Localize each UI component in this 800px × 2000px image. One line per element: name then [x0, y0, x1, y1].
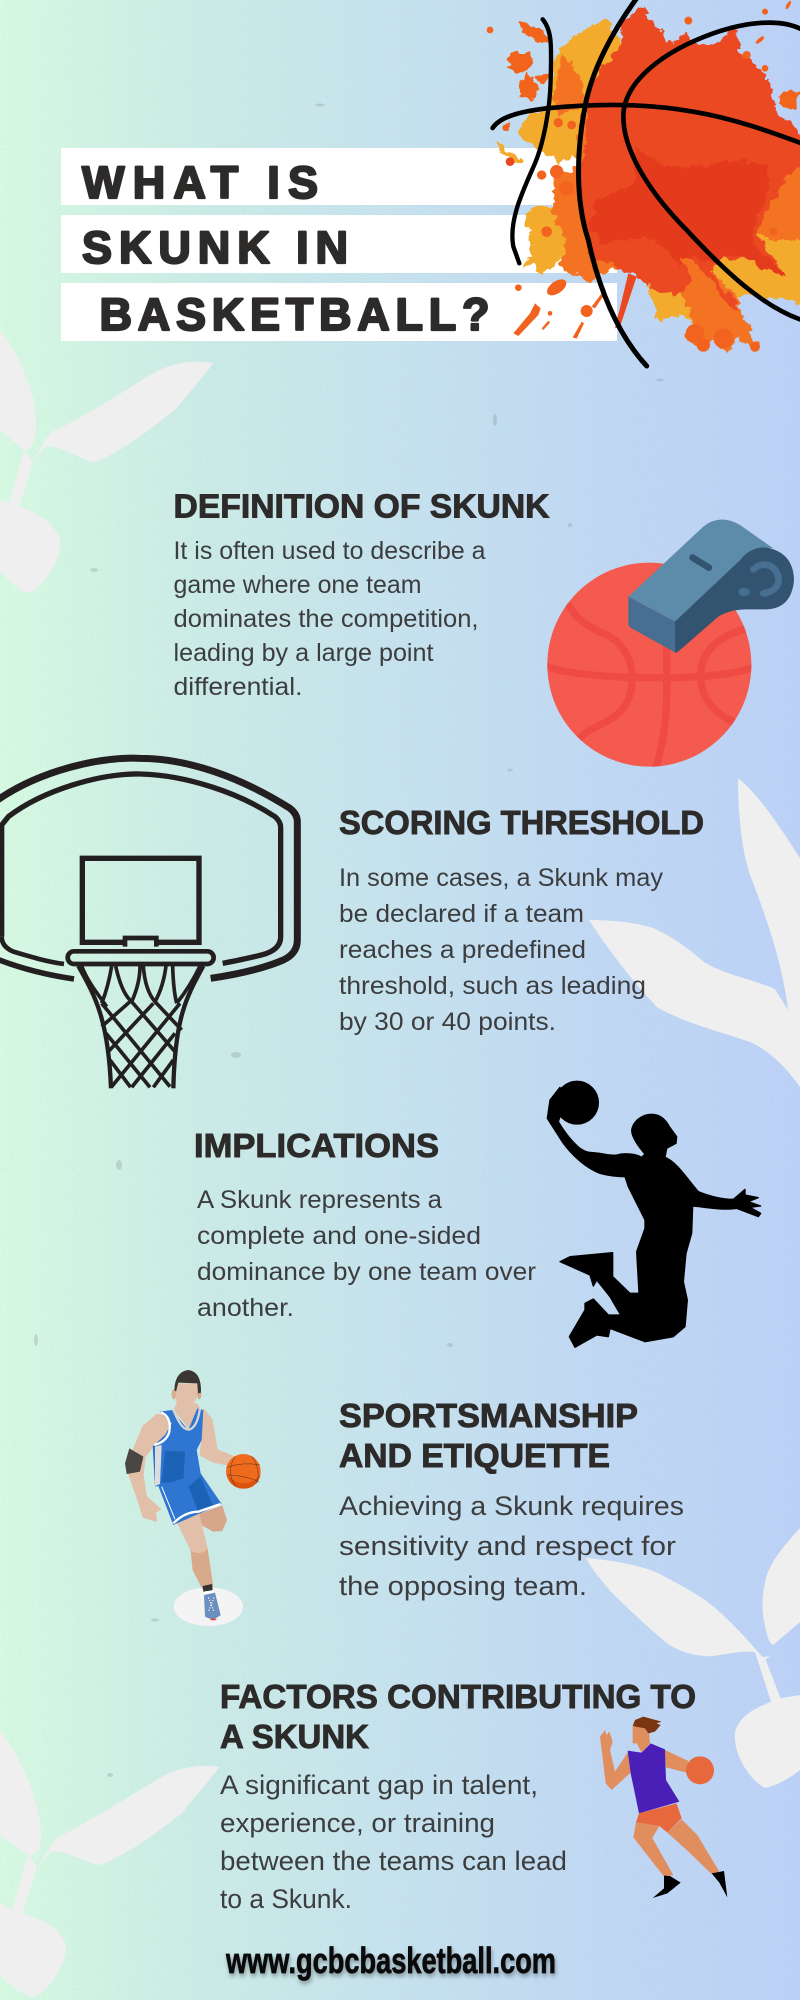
body: definition: dominates the competition, — [174, 605, 478, 633]
title line 1: WHAT IS — [82, 157, 318, 208]
body: scoring threshold: reaches a predefined — [339, 936, 586, 964]
body: sportsmanship: the opposing team. — [339, 1571, 587, 1601]
body: scoring threshold: be declared if a team — [339, 900, 584, 928]
section: scoring threshold — [339, 804, 704, 1036]
hoop net — [78, 966, 203, 1088]
basketball seams — [493, 0, 800, 366]
body: factors: to a Skunk. — [220, 1884, 352, 1914]
heading: implications: IMPLICATIONS — [194, 1127, 439, 1164]
body: scoring threshold: threshold, such as leading — [339, 972, 646, 1000]
icon: player in blue dribbling — [125, 1370, 261, 1626]
title line 2: SKUNK IN — [82, 222, 348, 273]
section: definition of skunk — [174, 488, 550, 701]
body: factors: A significant gap in talent, — [220, 1770, 538, 1800]
body: implications — [197, 1186, 536, 1322]
leaf: bottom left — [0, 1730, 219, 1997]
heading: sportsmanship: SPORTSMANSHIP — [339, 1397, 638, 1434]
body: implications: dominance by one team over — [197, 1258, 536, 1286]
heading: factors: FACTORS CONTRIBUTING TO — [220, 1678, 696, 1715]
leaf: top left — [0, 330, 213, 593]
icon: basketball with whistle — [545, 520, 794, 770]
body: factors: experience, or training — [220, 1808, 495, 1838]
body: scoring threshold: by 30 or 40 points. — [339, 1008, 556, 1036]
title — [82, 157, 490, 340]
body: scoring threshold — [339, 864, 663, 1036]
heading: factors: A SKUNK — [220, 1718, 369, 1755]
leaf: right middle — [589, 778, 800, 1087]
body: definition: leading by a large point — [174, 639, 434, 667]
hoop backboard — [0, 758, 297, 979]
section: sportsmanship and etiquette — [339, 1397, 684, 1601]
body: definition: game where one team — [174, 571, 422, 599]
icon: whistle — [628, 520, 794, 653]
body: definition: differential. — [174, 673, 302, 701]
leaf: bottom right — [586, 1528, 800, 1788]
body: scoring threshold: In some cases, a Skunk may — [339, 864, 663, 892]
heading: factors — [220, 1678, 696, 1755]
body: implications: another. — [197, 1294, 294, 1322]
body: definition: It is often used to describe a — [174, 537, 486, 565]
body: factors: between the teams can lead — [220, 1846, 567, 1876]
icon: red basketball — [545, 563, 753, 770]
body: definition — [174, 537, 486, 701]
body: implications: A Skunk represents a — [197, 1186, 442, 1214]
icon: basketball hoop — [0, 758, 297, 1088]
website url: www.gcbcbasketball.com — [225, 1940, 556, 1981]
title line 3: BASKETBALL? — [100, 289, 490, 340]
icon: player in purple — [600, 1717, 727, 1898]
section: implications — [194, 1127, 536, 1322]
section: factors contributing — [220, 1678, 696, 1914]
heading: sportsmanship: AND ETIQUETTE — [339, 1437, 610, 1474]
body: sportsmanship: Achieving a Skunk requires — [339, 1491, 684, 1521]
title bars — [61, 148, 617, 341]
heading: sportsmanship — [339, 1397, 638, 1474]
body: implications: complete and one-sided — [197, 1222, 481, 1250]
body: factors — [220, 1770, 567, 1914]
icon: dunking player silhouette — [547, 1081, 761, 1347]
body: sportsmanship: sensitivity and respect for — [339, 1531, 676, 1561]
basketball paint splash — [487, 0, 800, 366]
heading: scoring threshold: SCORING THRESHOLD — [339, 804, 704, 841]
body: sportsmanship — [339, 1491, 684, 1601]
heading: definition: DEFINITION OF SKUNK — [174, 488, 550, 524]
